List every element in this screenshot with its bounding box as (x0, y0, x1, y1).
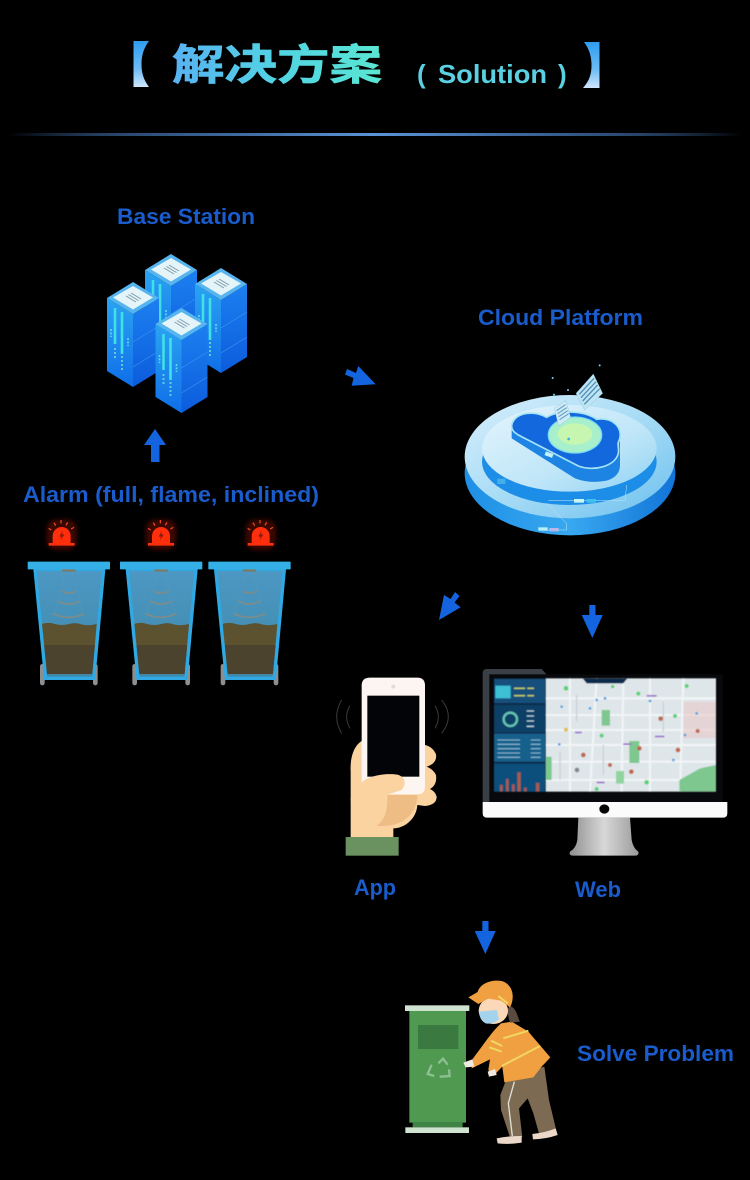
middle disc (482, 405, 657, 505)
dashboard (494, 678, 546, 792)
thumb (351, 774, 405, 832)
title (134, 41, 600, 89)
worker trousers (500, 1067, 557, 1137)
label: base station: Base Station (117, 204, 255, 229)
alarm 3 (245, 519, 276, 550)
camera dot (599, 804, 609, 814)
alarm 1 (46, 519, 77, 550)
floating documents (554, 374, 603, 426)
arrow: base station to cloud (345, 366, 376, 386)
bin 1 (28, 562, 110, 685)
base disc (465, 395, 675, 535)
phone (362, 678, 425, 794)
mask (479, 1010, 499, 1024)
arrow: to solve problem (475, 921, 496, 954)
chinese heading: 解决方案 (172, 42, 382, 89)
hair (507, 1006, 520, 1023)
bin 3 (208, 562, 291, 685)
sleeve (346, 837, 399, 856)
bins with alarms (28, 519, 291, 685)
green bin (405, 1005, 469, 1133)
english subtitle: Solution (438, 59, 547, 89)
stand (570, 818, 639, 856)
icon: desktop monitor with dashboard (483, 669, 727, 856)
shoes (497, 1128, 558, 1144)
monitor chin (483, 802, 727, 818)
cap (468, 981, 513, 1007)
icon: server cluster (107, 254, 247, 413)
right title bracket (583, 42, 600, 88)
left title bracket (134, 41, 149, 87)
label: cloud platform: Cloud Platform (478, 305, 643, 330)
label: web: Web (575, 877, 621, 902)
arrow: cloud to app (439, 592, 461, 620)
alarm 2 (146, 519, 176, 550)
icon: hand with phone (337, 678, 448, 856)
hands (463, 1059, 497, 1077)
arrow: cloud to web (582, 605, 603, 638)
arrow: alarm to base station (144, 429, 166, 462)
face (479, 997, 508, 1024)
hand (351, 735, 437, 837)
jacket (472, 1022, 550, 1082)
signal arcs (337, 700, 448, 733)
map (546, 678, 716, 792)
icon: cloud platform (465, 364, 675, 535)
english subtitle: ( (417, 59, 426, 89)
label: app: App (354, 875, 396, 900)
icon: worker and green bin (405, 981, 558, 1144)
label: solve problem: Solve Problem (577, 1041, 734, 1066)
label: alarm: Alarm (full, flame, inclined) (23, 482, 319, 507)
screen back (483, 669, 550, 802)
bin 2 (120, 562, 202, 685)
cloud (512, 412, 620, 482)
english subtitle: ) (558, 59, 567, 89)
